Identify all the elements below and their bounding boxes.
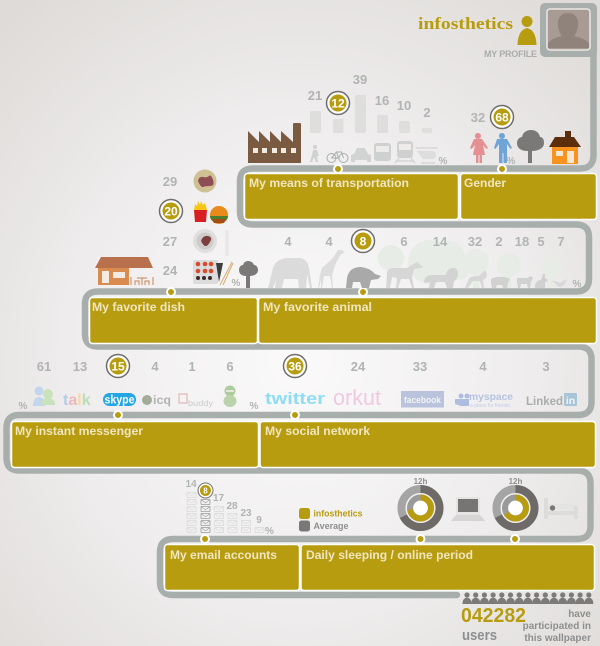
badge: 15 <box>106 354 130 378</box>
badge: 68 <box>490 106 514 128</box>
icon: profile person <box>518 16 536 45</box>
icon: steak plate <box>193 229 227 256</box>
percent sign dish: % <box>232 278 241 289</box>
icon: msn people <box>33 386 55 406</box>
gender value 32: 32 <box>471 110 485 125</box>
social values: 4 <box>479 359 487 374</box>
logo: facebook <box>401 391 444 408</box>
donut: online period <box>496 477 534 527</box>
panel: gender: Gender <box>464 176 506 190</box>
messenger values: 13 <box>73 359 87 374</box>
badge: 8 animal <box>352 230 374 252</box>
users label: users <box>462 627 497 644</box>
logo: buddy: buddy <box>188 398 214 408</box>
panel: daily sleeping and online period <box>301 544 594 590</box>
panel: my email accounts <box>164 544 300 590</box>
animal values: 32 <box>468 234 482 249</box>
logo: myspace: a place for friends <box>470 403 510 409</box>
email values: 14 <box>185 479 197 490</box>
logo: buddy <box>179 394 214 408</box>
animal values: 18 <box>515 234 529 249</box>
animal silhouettes <box>268 250 567 288</box>
lion <box>424 268 458 288</box>
elephant <box>268 258 312 288</box>
transportation values <box>308 72 431 120</box>
badge: 36: 36 <box>288 360 302 374</box>
connector dots on the track <box>114 165 519 543</box>
messenger values: 4 <box>151 359 159 374</box>
participation note: have <box>568 609 591 620</box>
messenger values: 61 <box>37 359 51 374</box>
rabbit <box>535 274 548 288</box>
horse <box>386 262 423 288</box>
badge: 8 email: 8 <box>203 486 208 496</box>
badge: 20: 20 <box>164 204 178 218</box>
people row <box>462 592 593 604</box>
panel: my favorite animal: My favorite animal <box>263 300 372 314</box>
participation note: this wallpaper <box>524 633 591 644</box>
icon: factory <box>248 123 301 163</box>
animal values: 14 <box>433 234 448 249</box>
animal values: 5 <box>537 234 545 249</box>
panel: gender <box>460 174 596 220</box>
panel: my favorite animal <box>258 298 596 344</box>
percent sign animal: % <box>573 279 582 290</box>
factory windows <box>253 148 296 153</box>
badge: 8 animal: 8 <box>360 234 367 248</box>
icon: man <box>494 133 512 163</box>
logo: talk: talk <box>63 392 91 409</box>
panel: my social network <box>260 422 596 468</box>
transportation values: 21 <box>308 88 322 103</box>
social values: 24 <box>351 359 366 374</box>
social values: 3 <box>542 359 550 374</box>
transportation values: 10 <box>397 98 411 113</box>
icon: sushi <box>193 260 233 285</box>
panel: my favorite dish: My favorite dish <box>92 300 185 314</box>
social values: 33 <box>413 359 427 374</box>
badge: 8 email <box>198 483 213 498</box>
logo: icq <box>142 393 171 407</box>
badge: 68: 68 <box>495 110 509 124</box>
logo: orkut: orkut <box>333 385 381 410</box>
email values <box>185 479 274 537</box>
panel: my instant messenger <box>12 422 258 468</box>
participation note <box>523 609 591 644</box>
icon: woman <box>470 133 488 163</box>
donut: online period: 12h <box>509 477 522 486</box>
icon: restaurant <box>95 257 153 285</box>
messenger values: 6 <box>226 359 234 374</box>
title: infosthetics: infosthetics <box>418 14 513 33</box>
legend: Average <box>314 521 348 531</box>
social values <box>351 359 550 374</box>
panel: my means of transportation <box>244 174 458 220</box>
badge: 20 <box>160 200 182 222</box>
animal values: 6 <box>400 234 408 249</box>
giraffe <box>318 250 345 288</box>
logo: linkedin: in <box>566 395 575 407</box>
email values: 17 <box>213 493 224 504</box>
pig <box>491 277 510 288</box>
goat <box>517 276 533 288</box>
logo: linkedin: Linked <box>526 394 563 408</box>
messenger values <box>37 359 234 374</box>
icon: laptop <box>451 497 485 521</box>
percent sign messenger: % <box>19 401 28 412</box>
icon: burger <box>210 206 228 224</box>
participation note: participated in <box>523 621 591 632</box>
bear <box>346 267 381 288</box>
envelope chart <box>187 492 264 533</box>
icon: house <box>549 131 581 164</box>
bird <box>552 279 567 287</box>
badge: 36 <box>284 354 306 378</box>
icon: fries <box>194 201 207 222</box>
messenger values: 1 <box>188 359 196 374</box>
panel: my instant messenger: My instant messenger <box>15 424 143 438</box>
animal values: 4 <box>284 234 292 249</box>
panel: my favorite dish <box>90 298 258 344</box>
profile frame with photo <box>540 3 597 57</box>
percent sign social: % <box>250 401 259 412</box>
transportation values: 2 <box>423 105 431 120</box>
badge: 12: 12 <box>331 96 345 110</box>
percent sign transport: % <box>439 156 448 167</box>
wolf <box>465 270 487 288</box>
icon: tree small <box>239 261 258 288</box>
icon: pasta plate <box>194 170 216 192</box>
animal values <box>284 234 565 249</box>
pale background trees <box>378 240 562 288</box>
icon: bed <box>544 498 578 519</box>
logo: skype: skype <box>104 392 135 406</box>
bar chart: transportation <box>310 95 432 133</box>
panel: my social network: My social network <box>265 424 370 438</box>
animal values: 7 <box>557 234 565 249</box>
transportation values: 39 <box>353 72 367 87</box>
panel: my means of transportation: My means of transportation <box>249 176 409 190</box>
panel: my email accounts: My email accounts <box>170 548 277 562</box>
badge: 15: 15 <box>111 360 125 374</box>
donut: sleeping period <box>402 477 440 527</box>
legend <box>299 508 362 532</box>
dish values: 29 <box>163 174 177 189</box>
logo: facebook: facebook <box>404 395 442 406</box>
dish values: 27 <box>163 234 177 249</box>
animal values: 2 <box>495 234 503 249</box>
legend: infosthetics <box>314 508 362 518</box>
logo: myspace: myspace <box>469 392 513 403</box>
dish values: 24 <box>163 263 178 278</box>
email values: % <box>265 526 274 537</box>
badge: 12 <box>326 92 350 114</box>
email values: 28 <box>226 501 238 512</box>
panel: daily sleeping and online period: Daily sleeping / online period <box>306 548 473 562</box>
participant count: 042282 <box>461 605 526 627</box>
logo: myspace <box>455 392 513 409</box>
logo: icq: icq <box>153 393 171 407</box>
transportation icons <box>310 141 438 163</box>
percent sign gender: % <box>507 156 516 167</box>
dish values <box>163 174 178 278</box>
animal values: 4 <box>325 234 333 249</box>
logo: twitter: twitter <box>265 389 325 408</box>
my profile label: MY PROFILE <box>484 49 537 59</box>
icon: green mascot <box>224 386 236 407</box>
transportation values: 16 <box>375 93 389 108</box>
icon: tree <box>517 130 544 163</box>
email values: 9 <box>256 515 262 526</box>
email values: 23 <box>240 508 252 519</box>
donut: sleeping period: 12h <box>414 477 428 486</box>
